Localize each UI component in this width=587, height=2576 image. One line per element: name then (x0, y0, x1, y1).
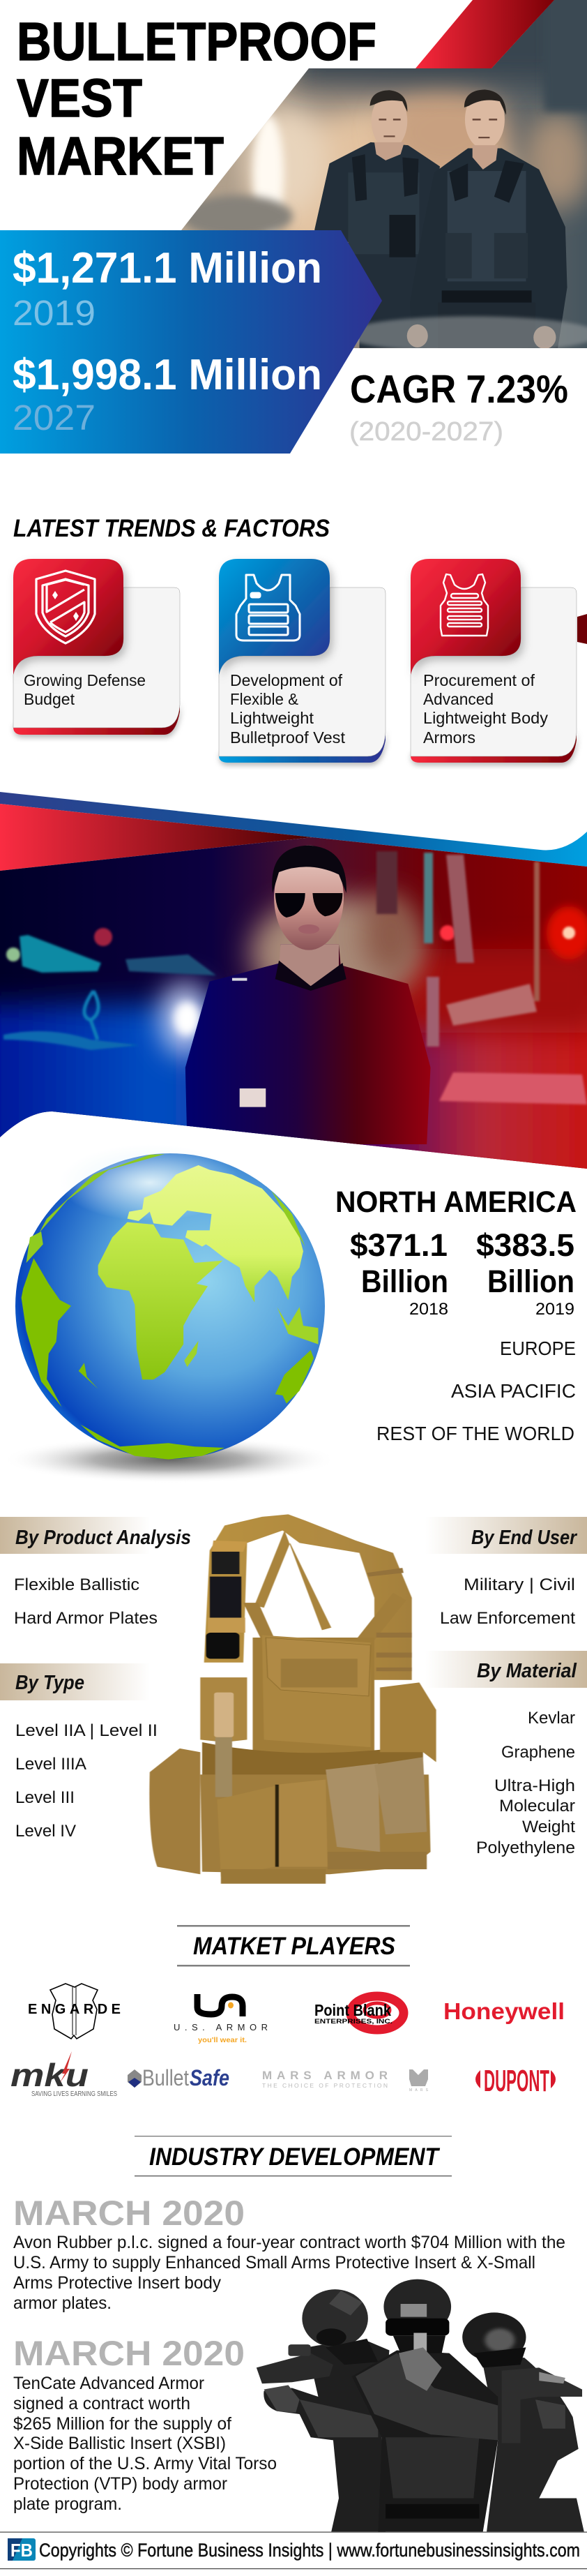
segment band: by material: By Material (477, 1660, 577, 1682)
card: growing defense budget (13, 559, 180, 735)
year 2027: 2027 (13, 398, 96, 437)
development: TenCate: X-Side Ballistic Insert (XSBI) (13, 2434, 226, 2453)
development: Avon Rubber: Arms Protective Insert body (13, 2273, 221, 2293)
logo: BulletSafe (128, 2065, 229, 2090)
logo: BulletSafe: Safe (190, 2065, 229, 2090)
2018 value: 2018 (409, 1300, 448, 1319)
list: type: Level IV (15, 1822, 76, 1841)
logo: Point Blank: Point Blank (314, 2001, 391, 2019)
logo: Point Blank: ENTERPRISES, INC. (314, 2018, 392, 2025)
list: material: Kevlar (528, 1709, 575, 1728)
other regions: EUROPE (500, 1338, 576, 1359)
hero photo: two officers in vests (181, 0, 587, 352)
dark red edge accent (577, 614, 587, 644)
list: type (15, 1721, 158, 1841)
card: advanced lightweight armor: Lightweight Body (423, 709, 548, 727)
2018 value (350, 1227, 448, 1319)
card text: Development of (230, 671, 343, 689)
2019 value: Billion (487, 1264, 574, 1299)
2018 value: Billion (361, 1264, 448, 1299)
development: TenCate: portion of the U.S. Army Vital Torso (13, 2454, 277, 2473)
globe (2, 1144, 337, 1483)
officer figure (185, 846, 431, 1144)
heading: market players: MATKET PLAYERS (193, 1933, 395, 1960)
development: Avon Rubber (13, 2194, 565, 2313)
segment band: by material (425, 1651, 587, 1688)
card: advanced lightweight armor (411, 559, 577, 763)
segment band: by product analysis (0, 1517, 191, 1554)
CAGR: (2020-2027) (349, 417, 503, 447)
logo: Honeywell: Honeywell (443, 1998, 565, 2024)
list: type: Level IIIA (15, 1755, 86, 1774)
card text: Growing Defense (24, 671, 146, 689)
logo: DuPont (475, 2064, 556, 2098)
heading: industry development: INDUSTRY DEVELOPMENT (149, 2143, 440, 2171)
development: Avon Rubber: U.S. Army to supply Enhanced Small Arms Protective Insert & X-Small (13, 2253, 535, 2272)
other regions (376, 1338, 576, 1444)
2019 value: $383.5 (476, 1227, 574, 1263)
card: growing defense budget: Budget (24, 690, 75, 708)
list: material: Graphene (501, 1743, 575, 1762)
list: end user: Military | Civil (464, 1575, 575, 1594)
list: material (476, 1709, 575, 1857)
list: end user: Law Enforcement (440, 1609, 575, 1628)
photo: officer with sunglasses (0, 837, 587, 1169)
development: TenCate: TenCate Advanced Armor (13, 2374, 204, 2393)
2019 value (476, 1227, 574, 1319)
card: flexible lightweight vest: Flexible & (230, 690, 298, 708)
development: Avon Rubber: Avon Rubber p.l.c. signed a four-year contract worth $704 Million with the (13, 2233, 565, 2252)
development: TenCate: $265 Million for the supply of (13, 2414, 231, 2434)
red triangle (0, 804, 312, 871)
logo: MKU: SAVING LIVES EARNING SMILES (31, 2090, 117, 2098)
footer (0, 2531, 587, 2569)
icon: shield (36, 571, 95, 643)
logo: Mars Armor: MARS (409, 2088, 429, 2092)
card: advanced lightweight armor: Advanced (423, 690, 494, 708)
logo: Mars Armor: MARS ARMOR (262, 2069, 388, 2082)
card: flexible lightweight vest: Lightweight (230, 709, 314, 727)
segment band: by type (0, 1663, 150, 1700)
logo: MKU (10, 2051, 117, 2098)
2019 value: 2019 (535, 1300, 574, 1319)
segment band: by type: By Type (15, 1672, 84, 1694)
region heading: NORTH AMERICA (335, 1185, 577, 1219)
title: VEST (17, 68, 142, 128)
logo: U.S. Armor: U.S. ARMOR (174, 2022, 268, 2032)
list: material: Polyethylene (476, 1839, 575, 1857)
photo: tactical team (257, 2279, 584, 2531)
development: TenCate (13, 2334, 277, 2514)
title: BULLETPROOF (17, 12, 376, 72)
logo: U.S. Armor: you'll wear it. (198, 2036, 247, 2044)
other regions: REST OF THE WORLD (376, 1423, 574, 1444)
list: material: Ultra-High (494, 1776, 575, 1795)
vest photo (149, 1514, 436, 1884)
title: MARKET (17, 126, 224, 186)
logo: Mars Armor (262, 2069, 429, 2092)
development: TenCate: plate program. (13, 2494, 122, 2514)
segment band: by end user (425, 1517, 587, 1554)
red diagonal stripe (416, 0, 554, 68)
north america values (335, 1185, 577, 1444)
logo: U.S. Armor (174, 1994, 268, 2044)
market size banner (0, 230, 382, 454)
CAGR (349, 367, 568, 447)
2018 value: $371.1 (350, 1227, 448, 1263)
list: type: Level IIA | Level II (15, 1721, 158, 1740)
development: TenCate: Protection (VTP) body armor (13, 2474, 227, 2494)
icon: armor vest (441, 574, 488, 636)
icon: vest (236, 575, 300, 641)
card: advanced lightweight armor: Armors (423, 728, 475, 747)
list: product analysis (14, 1575, 158, 1628)
logo: Engarde: ENGARDE (28, 2002, 121, 2017)
card: flexible lightweight vest: Bulletproof Vest (230, 728, 346, 747)
list: material: Molecular (499, 1797, 575, 1815)
logo: Engarde (28, 1984, 121, 2039)
value 2019: $1,271.1 Million (13, 244, 322, 292)
list: product analysis: Flexible Ballistic (14, 1575, 139, 1594)
value 2027: $1,998.1 Million (13, 351, 322, 399)
development: TenCate: MARCH 2020 (13, 2334, 245, 2373)
card text: Procurement of (423, 671, 535, 689)
title (17, 12, 376, 186)
globe shadow (2, 1436, 337, 1483)
list: product analysis: Hard Armor Plates (14, 1609, 158, 1628)
development: TenCate: signed a contract worth (13, 2394, 190, 2413)
development: Avon Rubber: armor plates. (13, 2293, 112, 2313)
icon: Fortune Business Insights logo: FB (10, 2540, 33, 2561)
logo: MKU: mku (10, 2057, 89, 2093)
continents (22, 1154, 318, 1460)
heading: latest trends: LATEST TRENDS & FACTORS (13, 515, 330, 542)
year 2019: 2019 (13, 293, 96, 333)
other regions: ASIA PACIFIC (451, 1380, 576, 1402)
list: end user (440, 1575, 575, 1628)
card: flexible lightweight vest (219, 559, 386, 763)
list: type: Level III (15, 1788, 75, 1807)
list: material: Weight (522, 1818, 575, 1836)
logo: Mars Armor: THE CHOICE OF PROTECTION (262, 2082, 388, 2089)
CAGR: CAGR 7.23% (350, 367, 568, 412)
logo: Point Blank (314, 1996, 404, 2030)
development: Avon Rubber: MARCH 2020 (13, 2194, 245, 2233)
segment band: by product analysis: By Product Analysis (15, 1527, 191, 1549)
blue diagonal band (0, 792, 587, 867)
logo: BulletSafe: Bullet (142, 2065, 189, 2090)
